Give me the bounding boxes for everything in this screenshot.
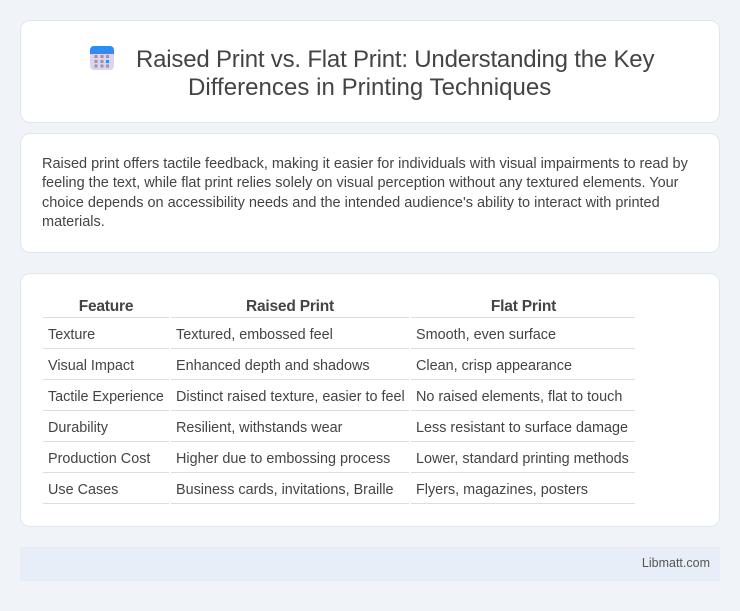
row: production cost: Higher due to embossing process	[176, 451, 390, 467]
row: texture: Smooth, even surface	[416, 327, 556, 343]
row: visual impact: Visual Impact	[48, 358, 134, 374]
intro text line 3: choice depends on accessibility needs and the intended audience's ability to interact with printed	[42, 195, 660, 211]
row: durability: Durability	[48, 420, 108, 436]
row: texture	[48, 327, 556, 343]
footer bar	[20, 547, 720, 581]
intro text line 2: feeling the text, while flat print relies solely on visual perception without any textured elements. Your	[42, 175, 679, 191]
row: production cost: Lower, standard printing methods	[416, 451, 629, 467]
table header	[79, 298, 556, 315]
heading line 1: Raised Print vs. Flat Print: Understanding the Key	[136, 46, 654, 73]
table header: Raised Print	[246, 298, 334, 315]
row: durability: Less resistant to surface damage	[416, 420, 628, 436]
row: production cost	[48, 451, 629, 467]
row: use cases: Business cards, invitations, Braille	[176, 482, 394, 498]
row: texture: Texture	[48, 327, 95, 343]
intro text line 4: materials.	[42, 214, 105, 230]
comparison table panel	[20, 273, 720, 527]
row: use cases: Use Cases	[48, 482, 118, 498]
row: tactile experience: Tactile Experience	[48, 389, 164, 405]
row: tactile experience	[48, 389, 622, 405]
table header: Flat Print	[491, 298, 556, 315]
row: texture: Textured, embossed feel	[176, 327, 333, 343]
row: visual impact: Clean, crisp appearance	[416, 358, 572, 374]
row: use cases	[48, 482, 588, 498]
row: visual impact: Enhanced depth and shadows	[176, 358, 370, 374]
footer text: Libmatt.com	[642, 556, 710, 570]
heading line 2: Differences in Printing Techniques	[188, 74, 551, 101]
row: use cases: Flyers, magazines, posters	[416, 482, 588, 498]
row: durability: Resilient, withstands wear	[176, 420, 342, 436]
row: visual impact	[48, 358, 572, 374]
row: tactile experience: No raised elements, flat to touch	[416, 389, 622, 405]
row: durability	[48, 420, 628, 436]
row: production cost: Production Cost	[48, 451, 150, 467]
table header: Feature	[79, 298, 133, 315]
title card	[20, 20, 720, 123]
intro text line 1: Raised print offers tactile feedback, making it easier for individuals with visual impairments to read by	[42, 156, 688, 172]
heading	[136, 46, 654, 101]
intro text panel	[20, 133, 720, 253]
row: tactile experience: Distinct raised texture, easier to feel	[176, 389, 405, 405]
icon: calendar	[90, 46, 114, 70]
